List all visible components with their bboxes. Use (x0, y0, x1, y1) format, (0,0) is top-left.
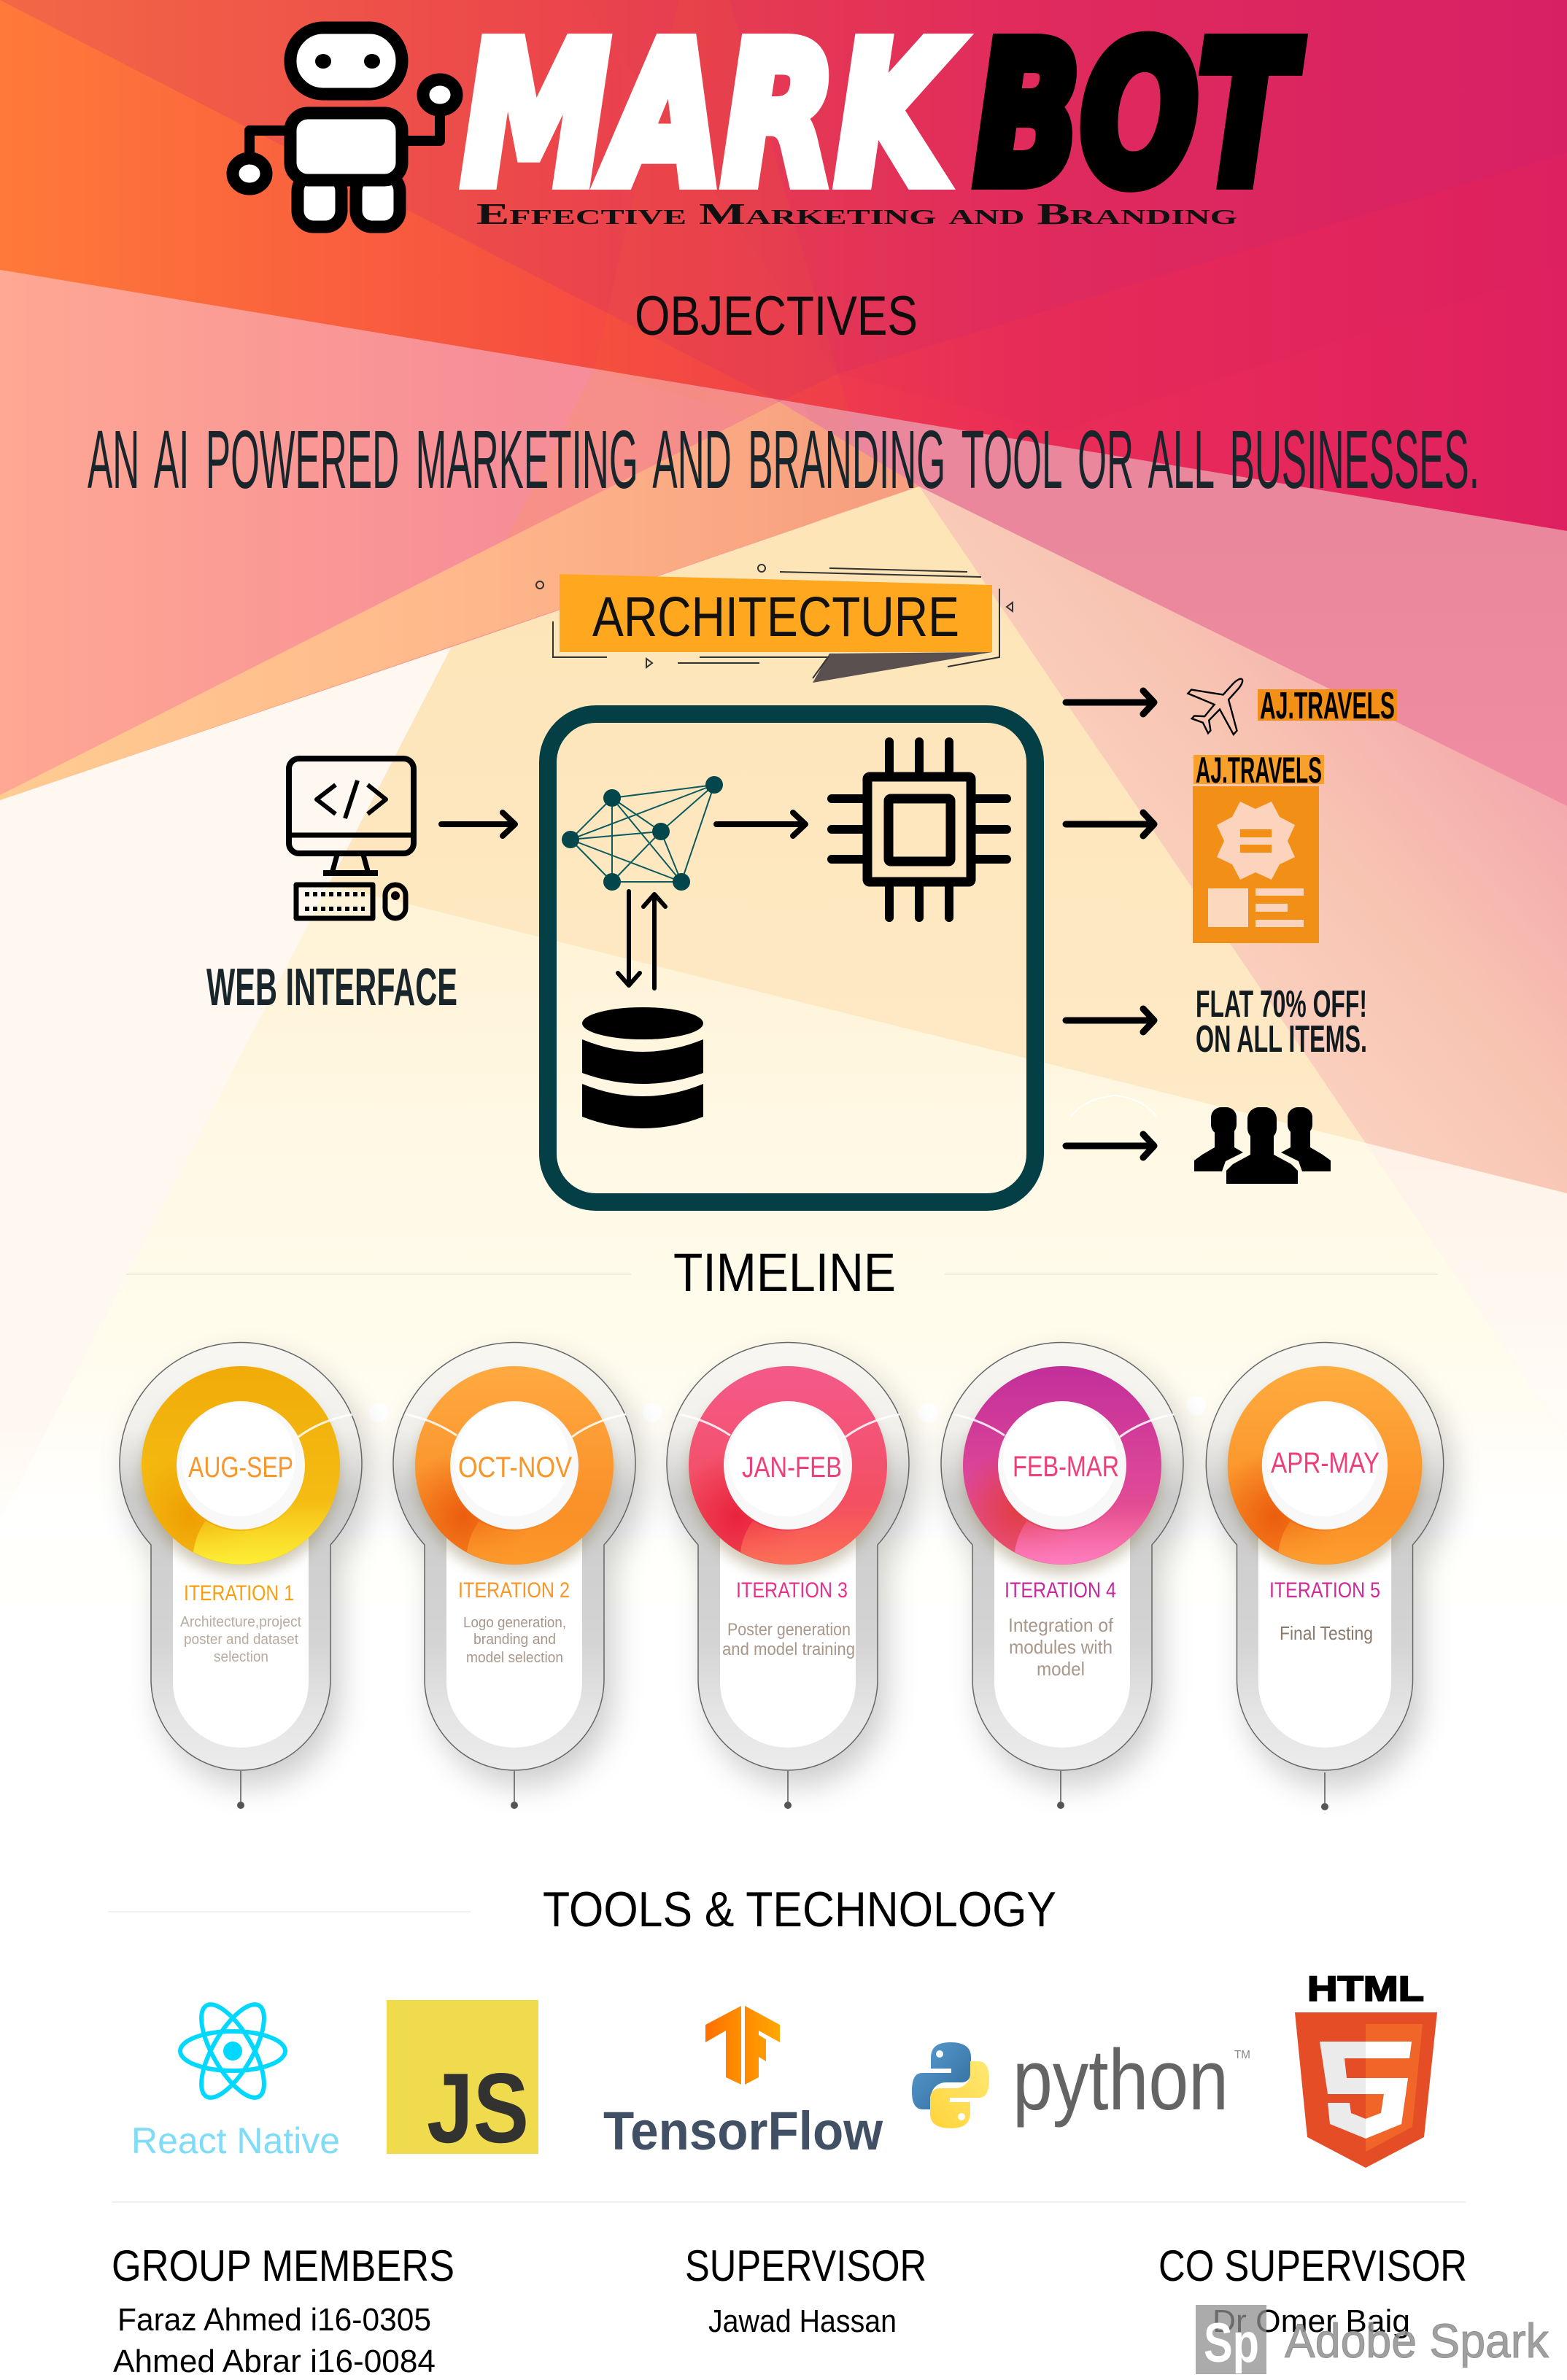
timeline card: iteration 2: OCT-NOV (458, 1451, 572, 1484)
arrow: output to poster (1066, 813, 1154, 836)
icon: processor chip (832, 742, 1007, 918)
timeline card: iteration 3 (667, 1343, 918, 1809)
section: group members: Ahmed Abrar i16-0084 (113, 2344, 436, 2379)
brand label: AJ.TRAVELS: AJ.TRAVELS (1260, 685, 1395, 727)
heading banner: architecture (536, 565, 1013, 683)
icon: airplane (1177, 659, 1265, 746)
label: web interface: WEB INTERFACE (206, 958, 457, 1017)
timeline card: iteration 3: Poster generation (727, 1620, 851, 1640)
icon: robot logo (233, 28, 457, 227)
heading: tools and technology (108, 1882, 1466, 2202)
timeline card: iteration 1: selection (214, 1649, 268, 1665)
title: MARKBOT logotype: BOT (975, 2, 1302, 228)
timeline card: iteration 4: modules with (1009, 1636, 1113, 1658)
timeline card: iteration 2: branding and (473, 1632, 556, 1648)
logo: TensorFlow: TensorFlow (603, 2101, 883, 2161)
timeline card: iteration 4 (941, 1343, 1192, 1809)
tagline: Effective Marketing and Branding (476, 197, 1237, 230)
heading: objectives: OBJECTIVES (635, 285, 918, 347)
logo: HTML5 (1295, 1970, 1437, 2168)
timeline card: iteration 1: Architecture,project (180, 1614, 301, 1630)
logo: React Native: React Native (131, 2120, 340, 2161)
icon: generated poster (1193, 786, 1319, 943)
timeline card: iteration 1: ITERATION 1 (184, 1581, 294, 1605)
timeline card: iteration 5: APR-MAY (1271, 1447, 1380, 1479)
poster title: AJ.TRAVELS (1193, 750, 1324, 791)
icon: neural network (562, 776, 723, 891)
heading: tools and technology: TOOLS & TECHNOLOGY (543, 1882, 1056, 1937)
section: group members (112, 2241, 454, 2379)
timeline card: iteration 4: model (1037, 1658, 1085, 1680)
icon: audience people (1194, 1107, 1331, 1184)
slogan text (1196, 983, 1367, 1061)
timeline card: iteration 1 (120, 1343, 371, 1809)
section: supervisor: SUPERVISOR (685, 2241, 926, 2290)
section: co supervisor: Dr Omer Baig (1212, 2303, 1410, 2339)
section: group members: GROUP MEMBERS (112, 2241, 454, 2290)
slogan text: ON ALL ITEMS. (1196, 1018, 1367, 1061)
timeline card: iteration 1: AUG-SEP (188, 1451, 293, 1484)
section: group members: Faraz Ahmed i16-0305 (117, 2302, 431, 2338)
heading: timeline: TIMELINE (673, 1242, 896, 1303)
logo: Python (912, 2032, 1250, 2128)
timeline card: iteration 4: Integration of (1008, 1614, 1114, 1636)
section: co supervisor (1158, 2241, 1467, 2339)
connector dots (369, 1396, 1206, 1422)
logo: HTML5: HTML (1307, 1970, 1424, 2009)
logo: Python: TM (1234, 2049, 1250, 2061)
slogan text: FLAT 70% OFF! (1196, 983, 1367, 1026)
logo: React Native (131, 1996, 340, 2161)
timeline card: iteration 4: FEB-MAR (1013, 1451, 1119, 1483)
timeline card: iteration 3: and model training (722, 1640, 855, 1659)
timeline card: iteration 2: model selection (466, 1650, 563, 1666)
arrows: network and database exchange (618, 891, 665, 988)
poster title: AJ.TRAVELS: AJ.TRAVELS (1196, 750, 1322, 791)
timeline card: iteration 3: JAN-FEB (742, 1451, 842, 1484)
section: co supervisor: CO SUPERVISOR (1158, 2241, 1467, 2290)
watermark: Adobe Spark: Sp (1204, 2312, 1259, 2374)
panel: AI system box (548, 714, 1035, 1202)
timeline card: iteration 3: ITERATION 3 (736, 1578, 848, 1602)
timeline card: iteration 5 (1206, 1343, 1452, 1810)
timeline card: iteration 5: ITERATION 5 (1269, 1578, 1380, 1602)
arrow: network to processor (716, 813, 805, 836)
icon: web interface computer (289, 759, 414, 918)
title: MARKBOT logotype: MARK (463, 2, 960, 228)
timeline card: iteration 1: poster and dataset (184, 1632, 298, 1648)
logo: TensorFlow (603, 2006, 883, 2161)
timeline card: iteration 2: Logo generation, (463, 1615, 566, 1631)
timeline card: iteration 4: ITERATION 4 (1005, 1578, 1116, 1602)
arrow: web interface to system (441, 813, 515, 836)
arrow: output to audience (1066, 1134, 1154, 1158)
section: supervisor: Jawad Hassan (708, 2303, 897, 2339)
timeline card: iteration 2: ITERATION 2 (458, 1578, 570, 1602)
small arc decoration (1071, 1096, 1156, 1116)
timeline card: iteration 2 (393, 1343, 644, 1809)
brand label: AJ.TRAVELS (1258, 685, 1397, 727)
logo: JavaScript: JS (427, 2053, 529, 2163)
icon: database (582, 1007, 703, 1128)
watermark: Adobe Spark (1196, 2305, 1549, 2374)
arrow: output to slogan (1066, 1009, 1154, 1032)
logo: Python: python (1013, 2032, 1229, 2128)
logo: JavaScript (387, 2000, 538, 2163)
section: supervisor (685, 2241, 926, 2339)
arrow: output to brand name (1066, 691, 1154, 714)
timeline card: iteration 5: Final Testing (1280, 1622, 1373, 1644)
watermark: Adobe Spark: Adobe Spark (1285, 2314, 1549, 2368)
heading banner: architecture: ARCHITECTURE (592, 586, 959, 648)
